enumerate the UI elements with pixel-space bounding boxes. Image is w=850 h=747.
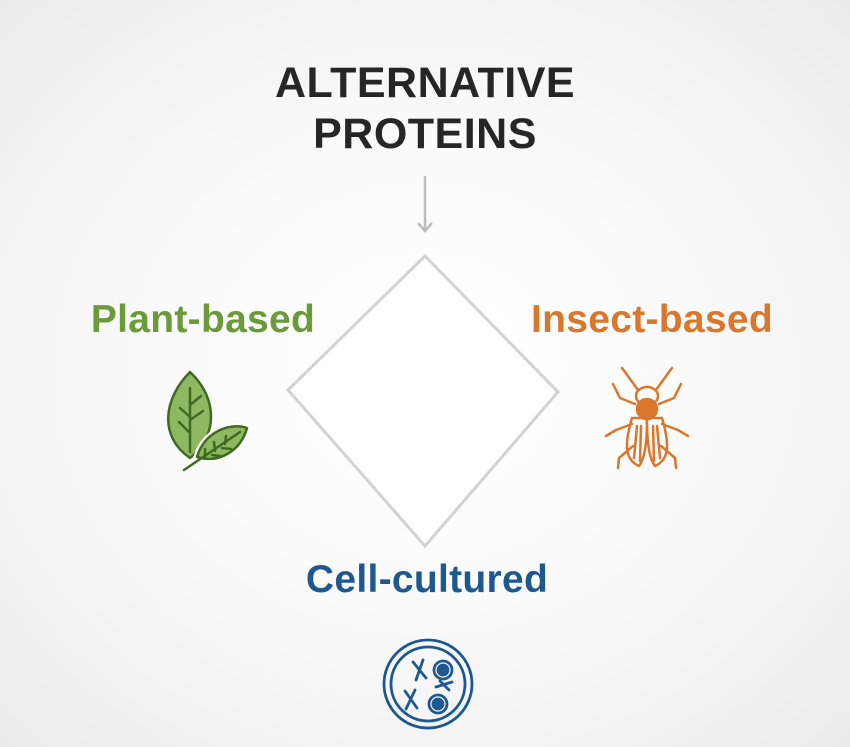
icon: petri dish: [384, 640, 472, 728]
diamond: [288, 256, 558, 546]
label: plant-based: Plant-based: [91, 298, 315, 341]
title: ALTERNATIVE: [275, 59, 575, 107]
label: insect-based: Insect-based: [531, 298, 773, 341]
label: cell-cultured: Cell-cultured: [306, 558, 548, 601]
icon: leaves: [168, 372, 247, 470]
icon: insect: [606, 368, 688, 468]
title: [275, 59, 575, 158]
title: PROTEINS: [313, 110, 537, 158]
arrow: down: [418, 176, 432, 231]
